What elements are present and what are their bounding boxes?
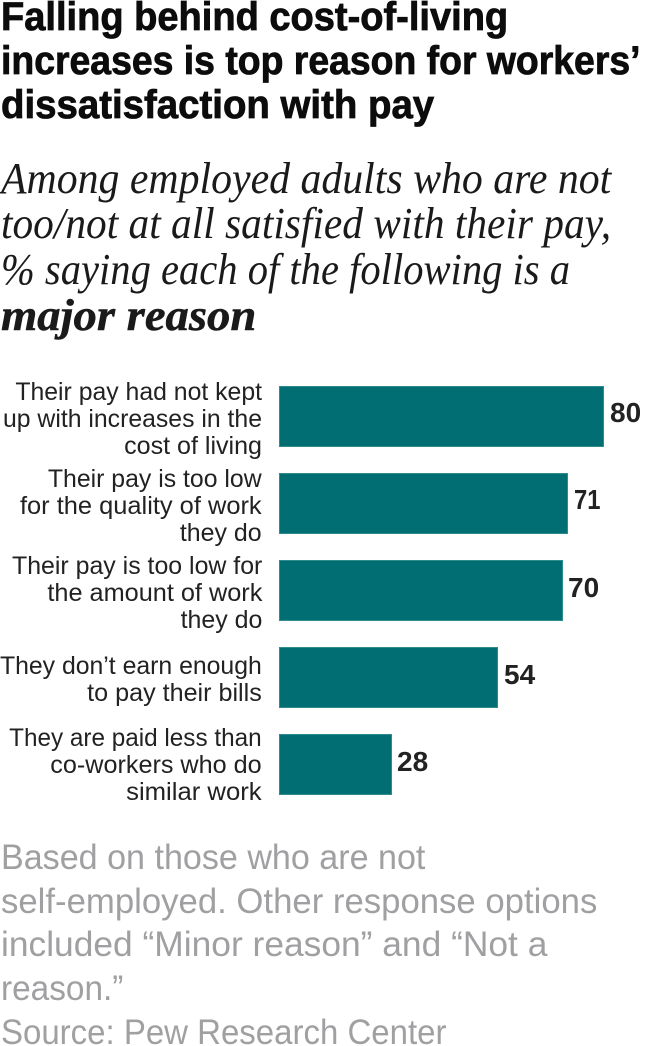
subtitle: too/not at all satisfied with their pay, xyxy=(1,199,611,248)
title: increases is top reason for workers’ xyxy=(1,39,641,83)
row 3 value: 70 xyxy=(568,572,599,603)
row 3 label: Their pay is too low for xyxy=(12,553,262,580)
row 4 bar xyxy=(279,647,498,708)
subtitle xyxy=(0,154,612,340)
row 1 label xyxy=(3,379,262,460)
title: dissatisfaction with pay xyxy=(1,83,434,127)
row 1 bar xyxy=(279,386,604,447)
row 2 label: for the quality of work xyxy=(20,493,262,520)
row 4 value: 54 xyxy=(504,659,535,690)
title xyxy=(1,0,641,127)
subtitle: % saying each of the following is a xyxy=(1,245,570,294)
row 2 label xyxy=(20,466,262,547)
row 4 label: to pay their bills xyxy=(87,680,262,707)
row 4 label: They don’t earn enough xyxy=(0,653,262,680)
subtitle: major reason xyxy=(1,291,256,340)
row 3 bar xyxy=(279,560,563,621)
row 3 label xyxy=(12,553,262,634)
row 5 label xyxy=(9,725,262,806)
row 2 label: they do xyxy=(180,520,262,547)
row 5 label: co-workers who do xyxy=(51,752,262,779)
bar chart xyxy=(0,379,641,806)
row 4 label xyxy=(0,653,262,707)
row 5 bar xyxy=(279,734,392,795)
footnote and source: included “Minor reason” and “Not a xyxy=(1,924,547,964)
row 3 label: they do xyxy=(180,607,262,634)
footnote and source: self-employed. Other response options xyxy=(1,881,597,921)
row 5 value: 28 xyxy=(397,746,428,777)
row 1 label: Their pay had not kept xyxy=(15,379,262,406)
row 2 label: Their pay is too low xyxy=(48,466,262,493)
row 2 bar xyxy=(279,473,568,534)
footnote and source: reason.” xyxy=(1,968,123,1008)
row 1 label: up with increases in the xyxy=(3,406,262,433)
row 5 label: similar work xyxy=(126,779,262,806)
subtitle: Among employed adults who are not xyxy=(1,154,611,202)
row 5 label: They are paid less than xyxy=(9,725,262,752)
footnote and source: Based on those who are not xyxy=(1,837,425,877)
row 1 value: 80 xyxy=(610,397,641,428)
footnote and source xyxy=(1,837,597,1046)
row 2 value: 71 xyxy=(574,484,600,515)
row 3 label: the amount of work xyxy=(47,580,262,607)
row 1 label: cost of living xyxy=(124,433,262,460)
